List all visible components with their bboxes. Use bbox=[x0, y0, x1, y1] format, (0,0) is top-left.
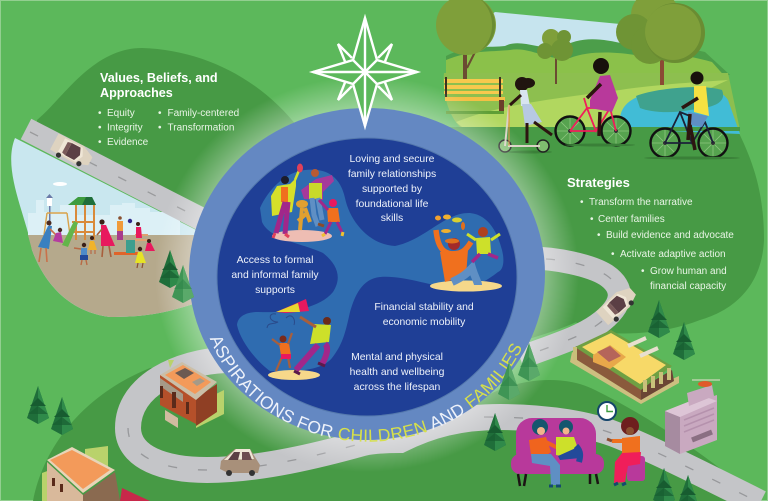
list: strategies: Build evidence and advocate bbox=[606, 230, 734, 241]
near hedge bbox=[446, 49, 728, 80]
building: bottom-left bbox=[42, 446, 150, 501]
woman yellow bbox=[556, 420, 580, 462]
ring: inner disc bbox=[217, 138, 517, 416]
heading: values: Approaches bbox=[100, 86, 173, 100]
child on swing bbox=[53, 228, 63, 243]
list: values col 2: Family-centered bbox=[168, 108, 239, 119]
cloud bbox=[53, 182, 67, 186]
hill: lower valley bbox=[33, 360, 745, 501]
text: Loving and secure: supported by bbox=[362, 184, 423, 195]
illustration: couch scene bbox=[511, 417, 645, 486]
list: values col 1: • bbox=[98, 137, 102, 148]
couch bbox=[511, 418, 604, 474]
lamp post bbox=[46, 194, 53, 235]
bench bbox=[444, 77, 505, 114]
list: strategies: Grow human and bbox=[650, 266, 727, 277]
text: Mental: Mental and physical bbox=[351, 352, 443, 363]
list: values col 1: Equity bbox=[107, 108, 135, 119]
path bbox=[456, 80, 728, 130]
child yellow bbox=[88, 236, 97, 254]
skyline bbox=[28, 200, 180, 235]
child with ball bbox=[117, 216, 132, 240]
adult with blue dress bbox=[38, 220, 58, 262]
text: Loving and secure: foundational life bbox=[356, 199, 429, 210]
bench and children bbox=[114, 222, 155, 255]
hill: strategies panel bbox=[445, 127, 764, 334]
hill: values panel bbox=[37, 48, 300, 210]
list: strategies: • bbox=[580, 197, 584, 208]
counselor bbox=[607, 417, 645, 485]
text: Mental: health and wellbeing bbox=[350, 367, 445, 378]
middle tree bbox=[537, 29, 573, 84]
right tree bbox=[616, 0, 705, 85]
text: Loving and secure: Loving and secure bbox=[350, 154, 434, 165]
car: lower road bbox=[220, 449, 260, 476]
illustration: family with dog bbox=[271, 164, 343, 242]
list: values col 1: Integrity bbox=[107, 122, 143, 134]
list: values col 2: Transformation bbox=[168, 122, 234, 134]
child bbox=[319, 199, 343, 236]
text: Access: Access to formal bbox=[237, 255, 313, 266]
illustration: leaves and jumping figures bbox=[430, 214, 502, 292]
swing frame bbox=[44, 213, 70, 235]
text: Loving and secure: family relationships bbox=[348, 169, 436, 180]
ground bbox=[456, 127, 740, 131]
man on dark bicycle bbox=[650, 72, 728, 158]
road: lower winding bbox=[128, 360, 760, 501]
list: values col 1: Evidence bbox=[107, 137, 149, 148]
list: strategies: • bbox=[597, 230, 601, 241]
hoop child bbox=[74, 243, 88, 265]
list: strategies: • bbox=[641, 266, 645, 277]
list: strategies: Transform the narrative bbox=[589, 197, 693, 208]
woman pink dress bbox=[97, 219, 115, 257]
woman on pink bicycle bbox=[556, 58, 630, 146]
far hedge bbox=[446, 39, 730, 75]
left tree bbox=[436, 0, 496, 80]
ring: outer bbox=[189, 108, 545, 440]
car: top left bbox=[48, 133, 95, 172]
car: right road bbox=[595, 284, 641, 328]
pond bbox=[620, 88, 740, 134]
list: values col 2: • bbox=[158, 108, 162, 119]
star compass bbox=[313, 18, 417, 126]
list: values col 1: • bbox=[98, 108, 102, 119]
dog bbox=[296, 200, 310, 230]
list: strategies: Activate adaptive action bbox=[620, 249, 726, 260]
patch: enclosed green beside road bbox=[520, 271, 618, 340]
girl on scooter bbox=[499, 77, 552, 154]
glow around ring bbox=[155, 76, 579, 472]
sky bbox=[450, 12, 660, 62]
list: values col 1: • bbox=[98, 122, 102, 134]
text: Mental: across the lifespan bbox=[354, 382, 441, 393]
road: right winding bbox=[520, 258, 619, 358]
panel: park scene bbox=[436, 0, 740, 160]
list: values col 2: • bbox=[158, 122, 162, 134]
blob: connecting light blue shape bbox=[237, 170, 503, 371]
text: Loving and secure: skills bbox=[381, 213, 403, 224]
heading: strategies: Strategies bbox=[567, 175, 630, 190]
text: Access: and informal family bbox=[231, 270, 319, 281]
lawn bbox=[444, 73, 740, 130]
child yellow dress bbox=[135, 247, 146, 268]
building: hospital bbox=[665, 380, 720, 454]
text: Access: supports bbox=[255, 285, 295, 296]
curved ring title: ASPIRATIONS FOR CHILDREN AND FAMILIES bbox=[210, 338, 521, 442]
list: strategies: financial capacity bbox=[650, 281, 726, 292]
man bbox=[301, 169, 334, 226]
heading: values: Values, Beliefs, and bbox=[100, 71, 218, 85]
play tower bbox=[62, 197, 96, 247]
building: library bbox=[160, 360, 224, 428]
text: Financial: economic mobility bbox=[383, 317, 466, 328]
trees bbox=[27, 250, 699, 501]
road: upper left bbox=[26, 129, 205, 221]
building: mall bbox=[570, 330, 679, 404]
list: strategies: • bbox=[611, 249, 615, 260]
illustration: kite flyers bbox=[267, 299, 331, 380]
woman bbox=[271, 164, 303, 238]
list: strategies: Center families bbox=[598, 214, 665, 225]
woman orange left bbox=[529, 419, 561, 486]
list: strategies: • bbox=[590, 214, 594, 225]
panel: playground bbox=[11, 138, 205, 317]
icon: clock bbox=[598, 402, 616, 420]
text: Financial: Financial stability and bbox=[374, 302, 474, 313]
